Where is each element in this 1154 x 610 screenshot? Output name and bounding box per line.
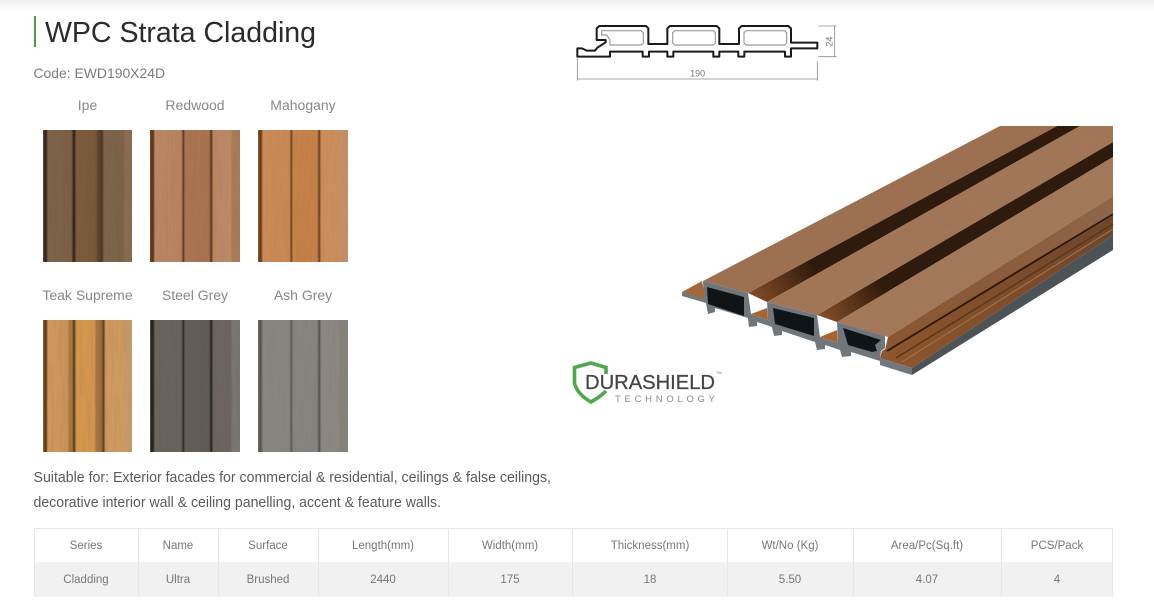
panel rear flange and grooves [682,126,1113,343]
swatch: Ipe: Ipe [78,97,97,113]
product code: Code: EWD190X24D [34,65,165,81]
panel side and lower flange [880,196,1113,375]
table header row: PCS/Pack [1031,540,1083,552]
suitability description [34,470,551,511]
table header row: Name [163,540,193,552]
panel front cross-section [682,281,912,375]
table header row: Series [70,540,103,552]
table data row: Ultra [166,574,191,586]
icon: green shield [574,363,606,402]
swatch: Mahogany: Mahogany [270,97,336,113]
table data row: 18 [644,574,656,586]
dimension label 24: 24 [824,37,834,47]
dimension lines [577,26,837,81]
profile hollow chambers [602,31,787,45]
wordmark: TM [716,370,722,375]
suitability description: decorative interior wall & ceiling panelling, accent & feature walls. [34,495,441,511]
table header row: Area/Pc(Sq.ft) [891,540,963,552]
table data row: 175 [500,574,520,586]
technical cross-section drawing [577,26,837,81]
swatch: Ash Grey [256,287,350,454]
panel hollow chambers [707,287,881,352]
swatch: Redwood [148,97,242,264]
table data row: Brushed [247,574,289,586]
table data row [63,574,1061,586]
panel top faces [703,126,1113,337]
product photo: strata cladding panel [682,126,1114,375]
wordmark: TECHNOLOGY [615,394,716,405]
DuraShield Technology logo [574,363,722,405]
table header row: Wt/No (Kg) [762,540,819,552]
swatch: Mahogany [256,97,350,264]
swatch: Steel Grey: Steel Grey [162,287,228,303]
colour swatches grid [41,97,350,454]
table data row: 4 [1054,574,1061,586]
profile outline [577,26,817,57]
table backgrounds and rules [34,528,1113,597]
swatch: Steel Grey [148,287,242,454]
table header row: Width(mm) [482,540,538,552]
table header row: Length(mm) [352,540,414,552]
table header row: Surface [248,540,288,552]
swatch: Teak Supreme: Teak Supreme [42,287,133,303]
table data row: Cladding [63,574,109,586]
table header row: Thickness(mm) [611,540,689,552]
suitability description: Suitable for: Exterior facades for commercial & residential, ceilings & false ceilings, [34,470,551,486]
swatch: Redwood: Redwood [165,97,225,113]
swatch: Teak Supreme [41,287,134,454]
swatch: Ipe [41,97,134,264]
table data row: 4.07 [916,574,938,586]
table header row [70,540,1083,552]
swatch: Ash Grey: Ash Grey [274,287,332,303]
wordmark: DURASHIELD [585,372,715,394]
title with green accent bar: WPC Strata Cladding [45,17,316,49]
top shadow band [0,0,1154,11]
table data row: 5.50 [779,574,801,586]
specification table [34,528,1113,597]
table data row: 2440 [370,574,396,586]
dimension label 190: 190 [690,69,705,79]
wordmark [583,370,722,405]
